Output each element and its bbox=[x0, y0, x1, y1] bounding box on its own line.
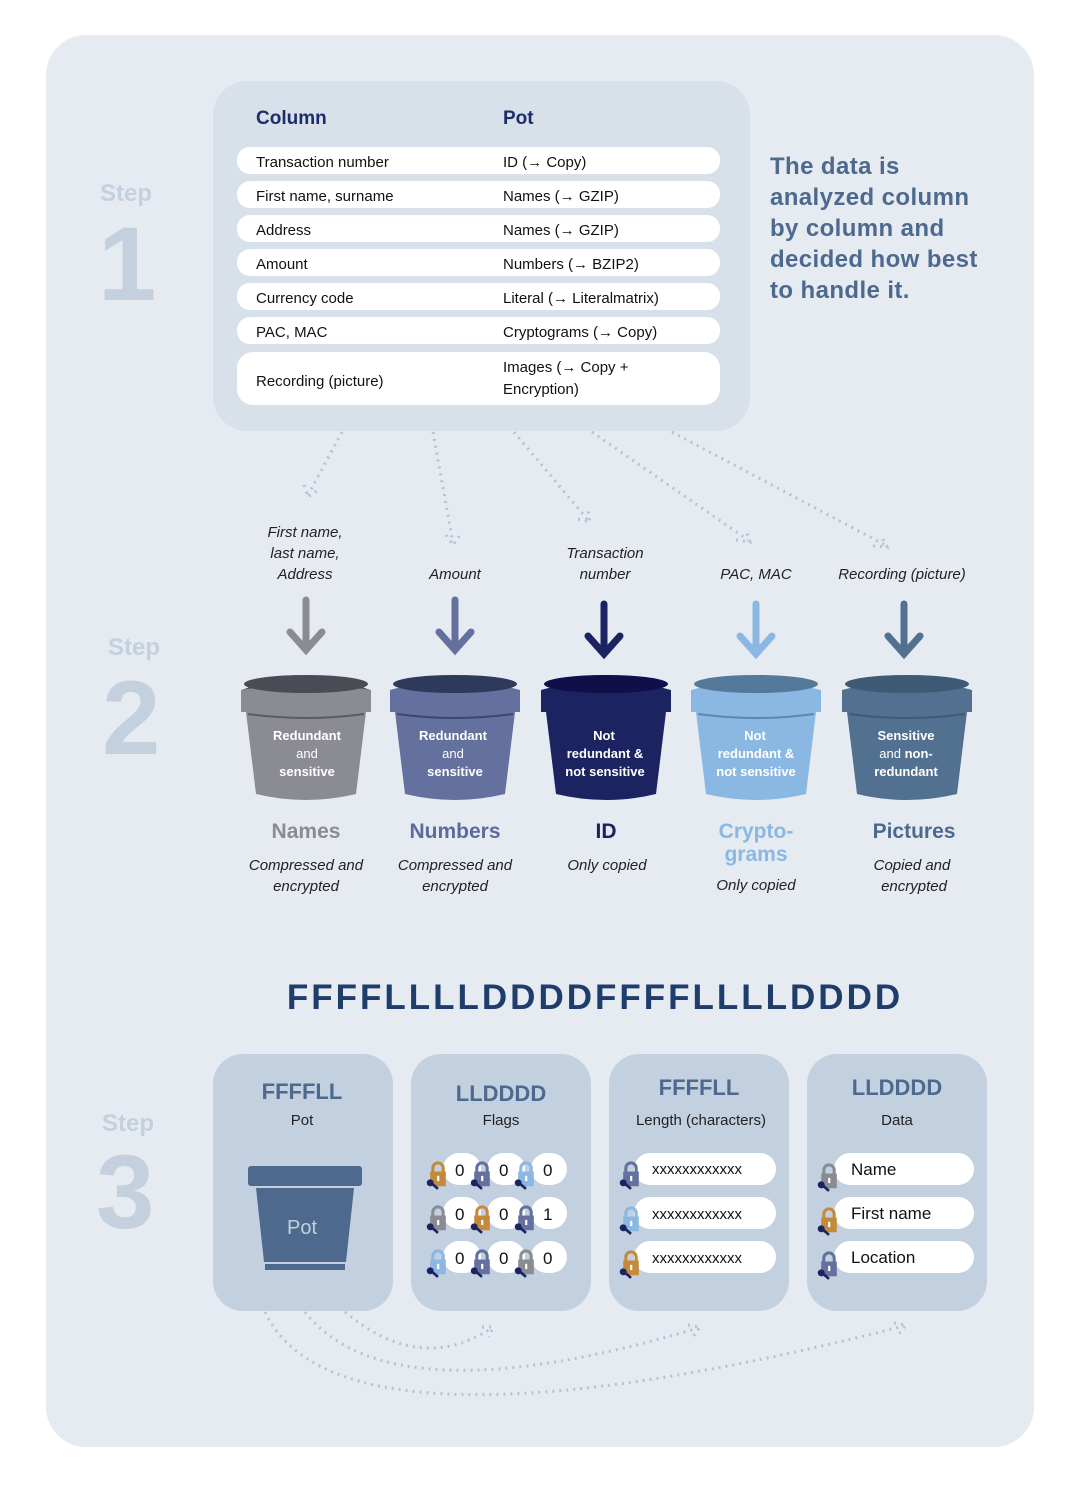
panel: column/pot table: Cryptograms (→ Copy) bbox=[503, 324, 657, 341]
bucket titles and descriptions: encrypted bbox=[881, 878, 948, 895]
buckets: and bbox=[296, 746, 318, 761]
buckets: Redundant bbox=[419, 728, 488, 743]
panel: pot: FFFFLL bbox=[262, 1079, 342, 1104]
panel: length: xxxxxxxxxxxx bbox=[652, 1250, 742, 1267]
buckets: redundant & bbox=[567, 746, 643, 761]
panel: column/pot table: Literal (→ Literalmatrix) bbox=[503, 290, 659, 307]
panel: column/pot table: Amount bbox=[256, 256, 309, 273]
panel: column/pot table: Images (→ Copy + bbox=[503, 359, 629, 376]
panel: flags: 0 bbox=[499, 1205, 508, 1224]
panel: column/pot table: Address bbox=[256, 222, 311, 239]
panel: flags: 0 bbox=[499, 1161, 508, 1180]
bucket labels: Transaction bbox=[566, 545, 644, 562]
bucket titles and descriptions bbox=[249, 820, 955, 895]
heading text: The data is bbox=[770, 153, 900, 180]
panel: flags: 0 bbox=[543, 1161, 552, 1180]
bucket titles and descriptions: encrypted bbox=[422, 878, 489, 895]
step 2 label: 2 bbox=[102, 660, 160, 777]
panel: data: First name bbox=[851, 1204, 931, 1223]
bucket titles and descriptions: Only copied bbox=[716, 877, 796, 894]
bucket labels: Address bbox=[276, 566, 333, 583]
bucket titles and descriptions: Compressed and bbox=[249, 857, 364, 874]
buckets: Sensitive bbox=[877, 728, 935, 743]
panel: column/pot table: Numbers (→ BZIP2) bbox=[503, 256, 639, 273]
step 2 label: Step bbox=[108, 634, 160, 661]
panel: length: FFFFLL bbox=[659, 1075, 739, 1100]
bucket titles and descriptions: Numbers bbox=[409, 820, 501, 843]
panel: pot: Pot bbox=[287, 1217, 317, 1239]
buckets: and non- bbox=[879, 746, 933, 761]
panel: column/pot table: Pot bbox=[503, 108, 534, 129]
heading text: to handle it. bbox=[770, 277, 910, 304]
heading text: by column and bbox=[770, 215, 945, 242]
bucket titles and descriptions: ID bbox=[596, 820, 616, 843]
panel: flags: Flags bbox=[483, 1112, 519, 1129]
panel: column/pot table: ID (→ Copy) bbox=[503, 154, 586, 171]
bucket titles and descriptions: Only copied bbox=[567, 857, 647, 874]
bucket labels: PAC, MAC bbox=[720, 566, 792, 583]
bucket labels: First name, bbox=[267, 524, 343, 541]
panel: column/pot table bbox=[213, 81, 750, 431]
bucket titles and descriptions: Copied and bbox=[874, 857, 951, 874]
panel: column/pot table: Recording (picture) bbox=[256, 373, 384, 390]
panel: data: Name bbox=[851, 1160, 896, 1179]
panel: length: xxxxxxxxxxxx bbox=[652, 1206, 742, 1223]
panel: flags: 0 bbox=[455, 1249, 464, 1268]
bucket labels: Amount bbox=[428, 566, 482, 583]
panel: length: xxxxxxxxxxxx bbox=[652, 1161, 742, 1178]
step 3 label: 3 bbox=[96, 1134, 154, 1251]
buckets: redundant & bbox=[718, 746, 794, 761]
panel: data: LLDDDD bbox=[852, 1075, 942, 1100]
panel: column/pot table: Names (→ GZIP) bbox=[503, 188, 619, 205]
panel: column/pot table: Currency code bbox=[256, 290, 354, 307]
heading text bbox=[770, 153, 978, 304]
panel: column/pot table: PAC, MAC bbox=[256, 324, 328, 341]
bucket titles and descriptions: encrypted bbox=[273, 878, 340, 895]
bucket titles and descriptions: Crypto- bbox=[719, 820, 793, 843]
panel: flags: 0 bbox=[455, 1161, 464, 1180]
buckets: Not bbox=[593, 728, 615, 743]
panel: data: Location bbox=[851, 1248, 915, 1267]
panel: flags: 0 bbox=[455, 1205, 464, 1224]
panel: flags: 0 bbox=[499, 1249, 508, 1268]
panel: pot: Pot bbox=[291, 1112, 314, 1129]
bucket labels: Recording (picture) bbox=[838, 566, 966, 583]
step 1 label: 1 bbox=[98, 206, 156, 323]
panel: column/pot table: Encryption) bbox=[503, 381, 579, 398]
bucket labels bbox=[267, 524, 966, 583]
panel: length bbox=[609, 1054, 789, 1311]
panel: data: Data bbox=[881, 1112, 913, 1129]
down arrows bbox=[290, 600, 920, 654]
buckets: Redundant bbox=[273, 728, 342, 743]
bucket titles and descriptions: grams bbox=[724, 843, 788, 866]
panel: length: Length (characters) bbox=[636, 1112, 766, 1129]
buckets bbox=[241, 675, 972, 800]
bucket titles and descriptions: Compressed and bbox=[398, 857, 513, 874]
buckets: Not bbox=[744, 728, 766, 743]
panel: pot bbox=[213, 1054, 393, 1311]
panel: column/pot table: Transaction number bbox=[256, 154, 389, 171]
buckets: not sensitive bbox=[716, 764, 796, 779]
buckets: sensitive bbox=[427, 764, 483, 779]
panel: flags: LLDDDD bbox=[456, 1081, 546, 1106]
bucket titles and descriptions: Names bbox=[272, 820, 340, 843]
buckets: sensitive bbox=[279, 764, 335, 779]
buckets: not sensitive bbox=[565, 764, 645, 779]
bucket titles and descriptions: Pictures bbox=[873, 820, 955, 843]
buckets: and bbox=[442, 746, 464, 761]
bucket labels: number bbox=[580, 566, 631, 583]
step 1 label: Step bbox=[100, 180, 152, 207]
dotted arrows from table bbox=[304, 432, 887, 547]
step 3 label: Step bbox=[102, 1110, 154, 1137]
heading text: decided how best bbox=[770, 246, 978, 273]
bucket labels: last name, bbox=[270, 545, 340, 562]
heading text: analyzed column bbox=[770, 184, 969, 211]
panel: column/pot table: Column bbox=[256, 108, 327, 129]
panel: flags: 1 bbox=[543, 1205, 552, 1224]
panel: column/pot table: First name, surname bbox=[256, 188, 394, 205]
panel: data bbox=[807, 1054, 987, 1311]
dotted arrows bottom bbox=[265, 1312, 906, 1395]
sequence heading: FFFFLLLLDDDDFFFFLLLLDDDD bbox=[287, 978, 903, 1017]
panel: column/pot table: Names (→ GZIP) bbox=[503, 222, 619, 239]
panel: flags bbox=[411, 1054, 591, 1311]
panel: flags: 0 bbox=[543, 1249, 552, 1268]
buckets: redundant bbox=[874, 764, 938, 779]
